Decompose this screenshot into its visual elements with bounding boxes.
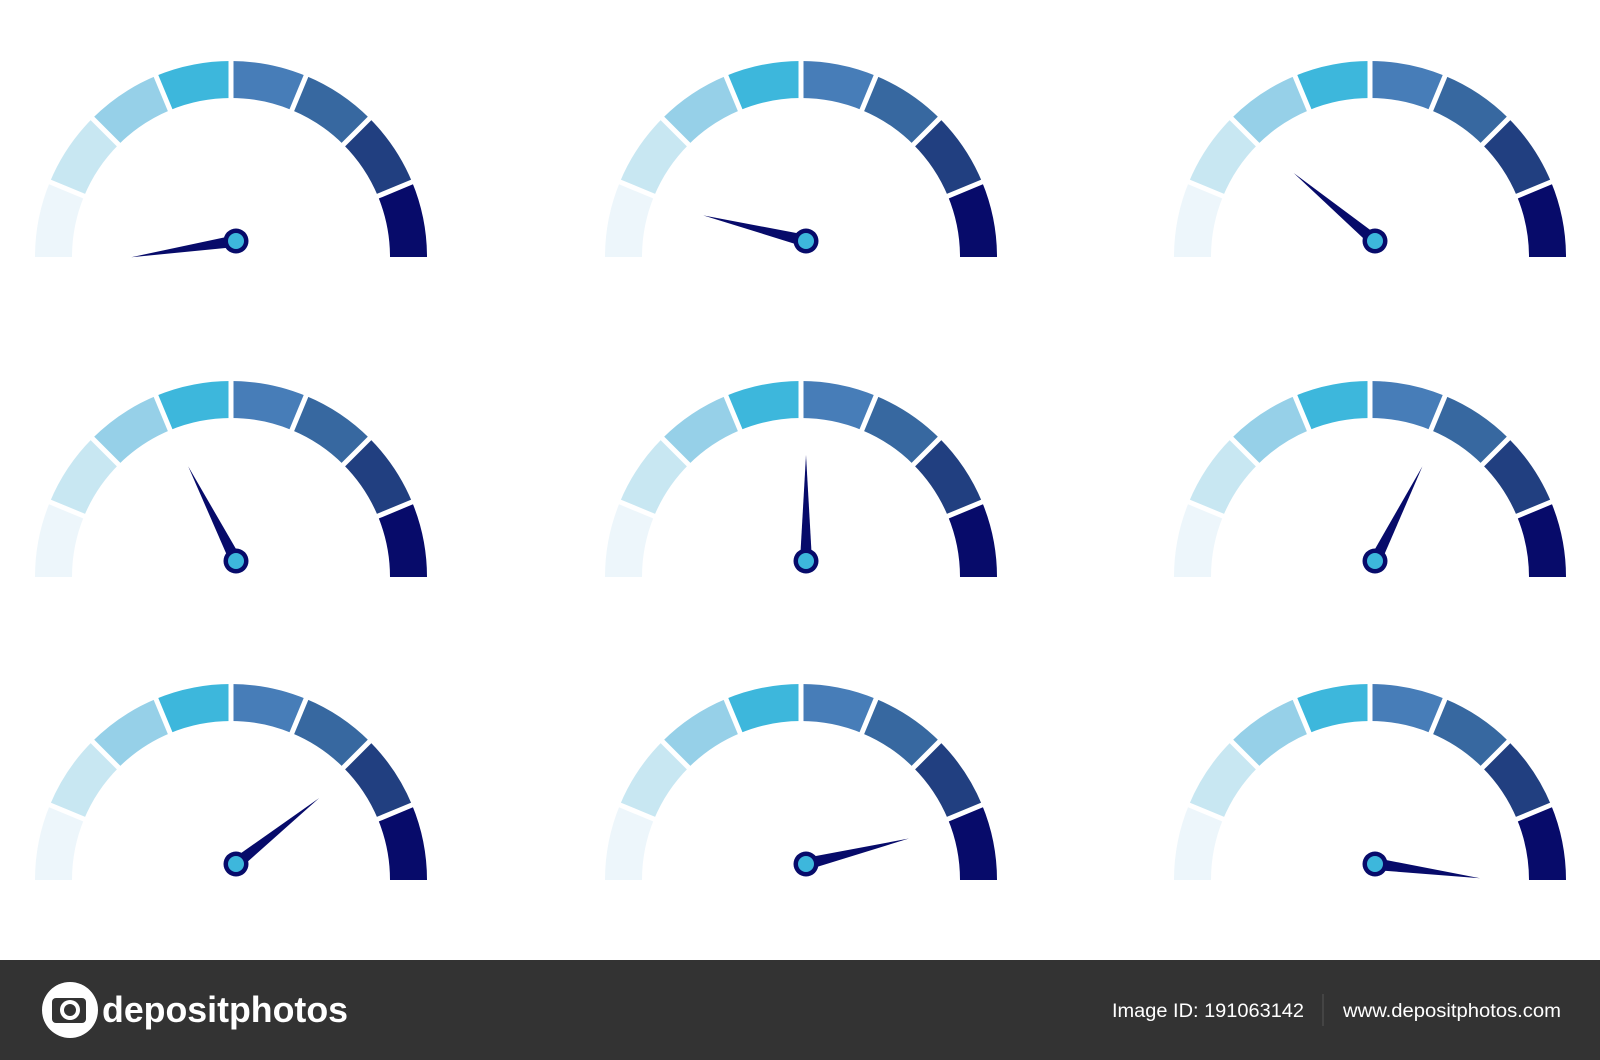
gauge 8 [612,675,990,880]
gauge 9 [1181,675,1559,884]
website: www.depositphotos.com [1342,1001,1561,1022]
icon: camera logo [42,982,98,1038]
gauge 3 [1181,52,1559,257]
gauge 2 [612,52,990,257]
gauge 6 [1181,372,1559,577]
footer bar [0,960,1600,1060]
gauge 7 [42,675,420,880]
image id: Image ID: 191063142 [1112,1001,1304,1022]
gauge 1 [42,52,420,263]
gauge 5 [612,372,990,577]
logo text: depositphotos [102,989,348,1030]
gauge 4 [42,372,420,577]
